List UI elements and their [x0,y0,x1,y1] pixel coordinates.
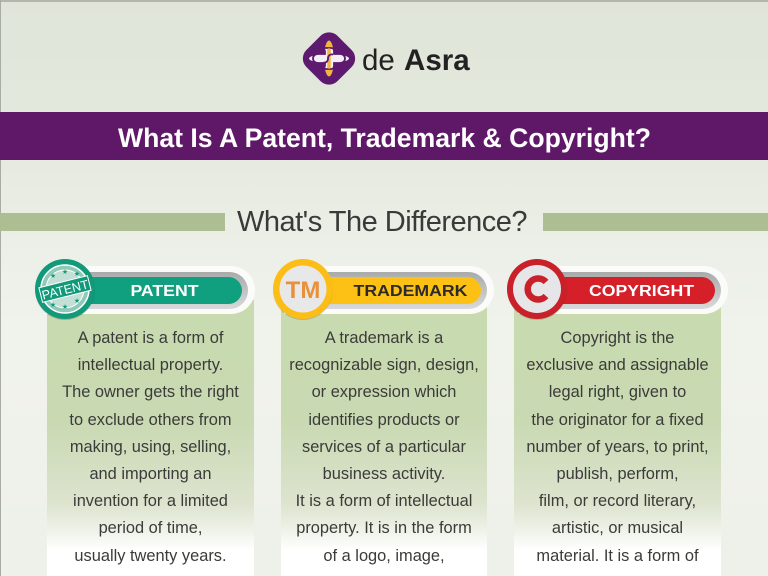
icon: copyright badge [507,259,567,320]
patent description [62,329,239,565]
patent label pill [45,266,255,314]
trademark description: property. It is in the form [296,519,472,537]
title band [0,112,768,160]
logo: de Asra [302,32,470,85]
patent label pill: PATENT [130,283,199,300]
trademark description: A trademark is a [325,329,443,347]
copyright label pill [518,266,728,314]
trademark label pill [284,266,494,314]
trademark description: business activity. [323,465,445,483]
patent description: The owner gets the right [62,383,239,401]
patent description: and importing an [89,465,212,483]
trademark label pill: TRADEMARK [354,283,467,300]
subheading with side bars [0,206,768,238]
icon: patent stamp: ★ [74,270,80,278]
right bar [543,213,768,231]
copyright description: exclusive and assignable [526,356,709,374]
logo wordmark: de Asra [362,44,470,77]
copyright description: number of years, to print, [526,438,709,456]
icon: patent stamp: ★ [74,297,80,305]
trademark description: It is a form of intellectual [296,492,472,510]
copyright description: artistic, or musical [552,519,683,537]
copyright description: the originator for a fixed [531,411,704,429]
trademark description: services of a particular [302,438,466,456]
copyright description: film, or record literary, [539,492,696,510]
copyright description: Copyright is the [561,329,674,347]
title band: What Is A Patent, Trademark & Copyright? [118,123,651,153]
patent description: usually twenty years. [74,547,227,565]
panel: trademark [281,300,487,576]
patent description: to exclude others from [69,411,232,429]
icon: TM badge [273,259,333,320]
copyright label pill: COPYRIGHT [589,283,694,300]
icon: TM badge: TM [286,277,320,304]
left bar [0,213,225,231]
icon: patent stamp [35,259,95,320]
page edge lines [0,0,768,2]
icon: patent stamp: ★ [62,303,68,311]
patent description: making, using, selling, [70,438,231,456]
panel: copyright [514,300,721,576]
icon: patent stamp: PATENT [41,277,90,303]
copyright description: material. It is a form of [536,547,699,565]
copyright description: legal right, given to [549,383,686,401]
patent description: invention for a limited [73,492,228,510]
icon: patent stamp: ★ [50,301,56,309]
copyright description: publish, perform, [556,465,679,483]
trademark description: recognizable sign, design, [289,356,479,374]
patent description: intellectual property. [78,356,223,374]
icon: logo diamond [302,32,356,85]
trademark description: identifies products or [308,411,460,429]
icon: patent stamp: ★ [50,272,56,280]
trademark description: or expression which [312,383,456,401]
subheading text: What's The Difference? [237,206,527,238]
patent description: period of time, [99,519,202,537]
panel: patent [47,300,254,576]
trademark description [289,329,479,576]
trademark description: of a logo, image, [323,547,445,565]
icon: patent stamp: ★ [62,268,68,276]
patent description: A patent is a form of [78,329,223,347]
copyright description [526,329,709,576]
